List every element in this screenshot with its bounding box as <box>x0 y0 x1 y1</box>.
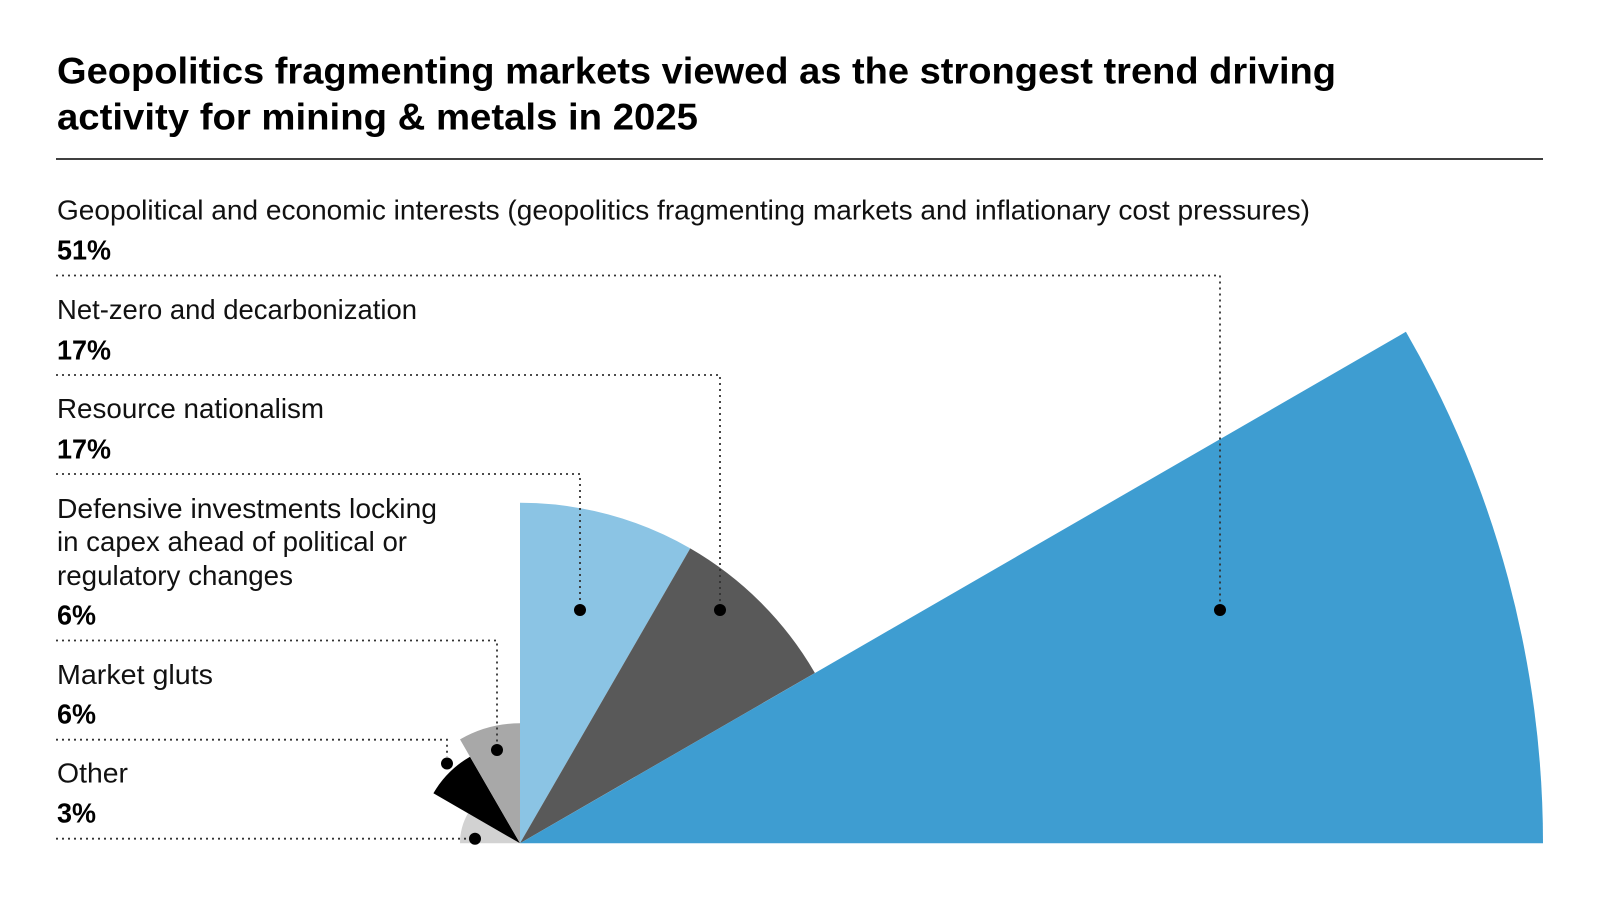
title <box>57 50 1336 138</box>
title: activity for mining & metals in 2025 <box>57 96 698 138</box>
title: Geopolitics fragmenting markets viewed as the strongest trend driving <box>57 50 1336 92</box>
item: resource nationalism: Resource nationalism <box>57 393 324 424</box>
item: resource nationalism <box>56 393 586 616</box>
item: other: Other <box>57 758 128 788</box>
item: geopolitical and economic interests <box>56 194 1310 616</box>
sector: other 3% <box>460 813 520 843</box>
item: market gluts: Market gluts <box>57 659 213 690</box>
sector: geopolitical and economic interests 51% <box>520 332 1543 843</box>
item: net-zero and decarbonization: Net-zero and decarbonization <box>57 294 417 325</box>
item: resource nationalism: 17% <box>57 434 111 464</box>
item: defensive investments: regulatory changes <box>57 560 293 591</box>
item: defensive investments: 6% <box>57 600 96 630</box>
item: net-zero and decarbonization <box>56 294 726 616</box>
sector: net-zero and decarbonization 17% <box>520 548 815 843</box>
item: net-zero and decarbonization: 17% <box>57 334 111 366</box>
item: geopolitical and economic interests: 51% <box>57 234 111 266</box>
item: market gluts: 6% <box>57 698 96 730</box>
item: other: 3% <box>57 798 96 828</box>
item: other <box>56 758 481 845</box>
sector: market gluts 6% <box>433 757 520 843</box>
item: defensive investments <box>56 493 503 756</box>
sector: resource nationalism 17% <box>520 503 690 843</box>
item: market gluts <box>56 659 453 770</box>
radial sector chart <box>433 332 1543 843</box>
item: geopolitical and economic interests: Geopolitical and economic interests (geopolitics fragmenting markets and inflationary cost pressures) <box>57 194 1310 226</box>
item: defensive investments: in capex ahead of political or <box>57 526 407 557</box>
sector: defensive investments 6% <box>460 723 520 843</box>
item: defensive investments: Defensive investments locking <box>57 493 437 524</box>
